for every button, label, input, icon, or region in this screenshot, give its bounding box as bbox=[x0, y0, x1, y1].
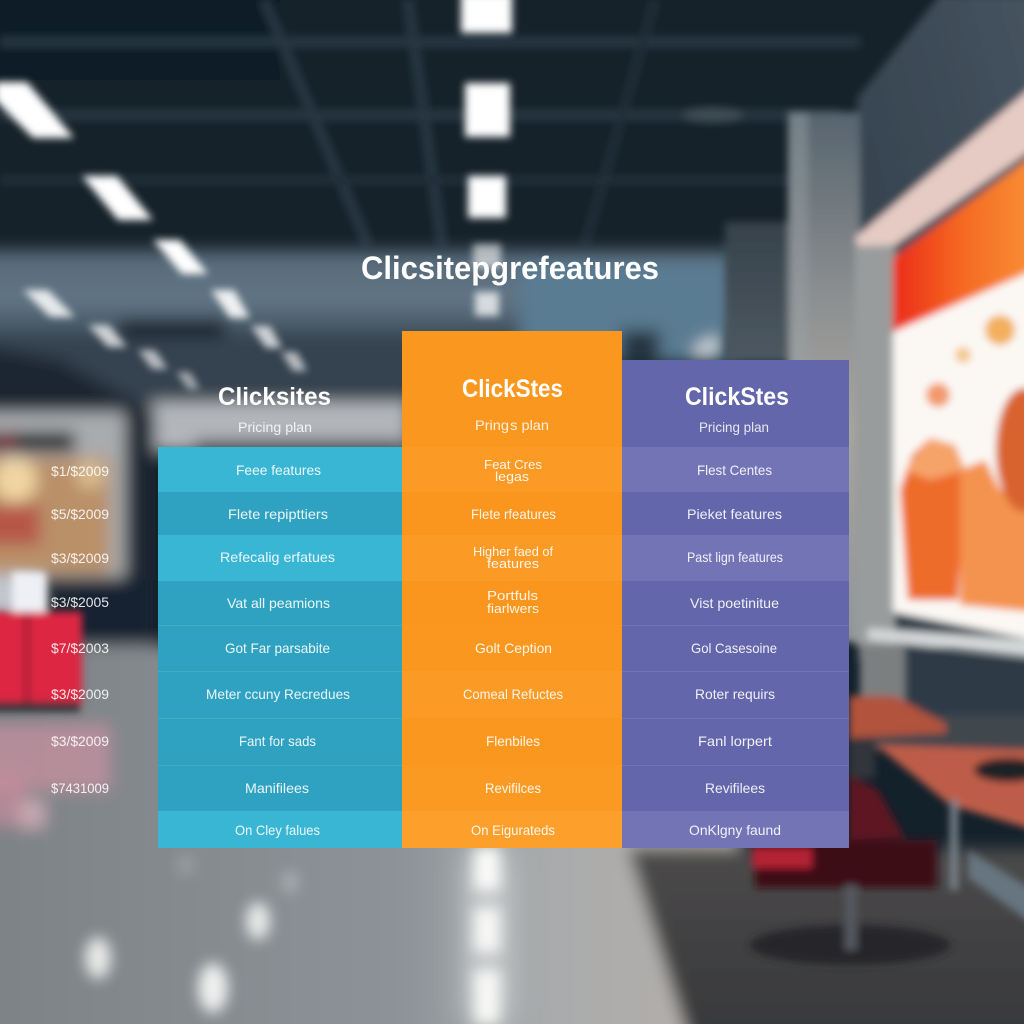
orange row labels: On Eigurateds bbox=[471, 822, 555, 838]
right side architecture bbox=[725, 0, 1024, 965]
teal row labels bbox=[206, 462, 350, 838]
back wall bbox=[150, 402, 410, 452]
purple row labels: Pieket features bbox=[687, 506, 782, 522]
price column: $7/$2003 bbox=[51, 641, 109, 656]
tables and chairs bbox=[849, 696, 946, 738]
teal row labels: Vat all peamions bbox=[227, 595, 330, 611]
title: Clicsitepgrefeatures bbox=[361, 250, 659, 286]
heading: teal plan: Clicksites bbox=[218, 383, 331, 411]
teal row labels: Feee features bbox=[236, 462, 321, 478]
orange row labels: Comeal Refuctes bbox=[463, 686, 563, 702]
teal row labels: Fant for sads bbox=[239, 733, 316, 749]
panel: teal plan column bbox=[158, 383, 402, 848]
dark floor right bbox=[628, 848, 1024, 1024]
orange row labels: Flete rfeatures bbox=[471, 506, 556, 522]
teal row labels: Meter ccuny Recredues bbox=[206, 686, 350, 702]
orange row labels: Feat Cres bbox=[484, 457, 543, 472]
price column: $3/$2009 bbox=[51, 734, 109, 749]
red counters bbox=[0, 612, 82, 704]
price column: $3/$2009 bbox=[51, 551, 109, 566]
floor reflections bbox=[85, 848, 509, 1024]
price column: $3/$2005 bbox=[51, 595, 109, 610]
purple row labels: Revifilees bbox=[705, 780, 765, 796]
orange row labels: Portfuls bbox=[487, 588, 539, 603]
teal rows bbox=[158, 447, 402, 848]
mural bbox=[893, 155, 1024, 640]
orange row labels: Revifilces bbox=[485, 780, 541, 796]
orange row labels: legas bbox=[495, 469, 530, 484]
subheading: teal plan: Pricing plan bbox=[238, 419, 312, 435]
price column: $7431009 bbox=[51, 781, 109, 796]
orange row labels: Higher faed of bbox=[473, 544, 553, 559]
teal row labels: Flete repipttiers bbox=[228, 506, 328, 522]
subheading: purple plan: Pricing plan bbox=[699, 419, 769, 435]
purple column rows bbox=[622, 360, 849, 848]
mid ceiling band bbox=[0, 250, 780, 335]
orange column rows bbox=[402, 331, 622, 848]
price column: $5/$2009 bbox=[51, 507, 109, 522]
ceiling lights bbox=[0, 0, 512, 389]
purple row labels bbox=[687, 462, 783, 838]
price column: $3/$2009 bbox=[51, 687, 109, 702]
panel: purple plan column bbox=[622, 360, 849, 848]
heading: purple plan: ClickStes bbox=[685, 383, 789, 411]
orange row labels bbox=[463, 457, 563, 838]
price column bbox=[51, 464, 109, 796]
teal row labels: Manifilees bbox=[245, 780, 309, 796]
left store bbox=[0, 345, 150, 660]
red reflection bbox=[0, 725, 110, 790]
teal row labels: Got Far parsabite bbox=[225, 640, 330, 656]
teal row labels: Refecalig erfatues bbox=[220, 549, 335, 565]
price column: $1/$2009 bbox=[51, 464, 109, 479]
heading: orange plan: ClickStes bbox=[462, 375, 563, 403]
teal row labels: On Cley falues bbox=[235, 822, 320, 838]
purple row labels: Past lign features bbox=[687, 549, 783, 565]
purple row labels: Vist poetinitue bbox=[690, 595, 779, 611]
ceiling bbox=[0, 0, 1024, 252]
purple row labels: Fanl lorpert bbox=[698, 733, 772, 749]
purple row labels: Roter requirs bbox=[695, 686, 775, 702]
orange row labels: Flenbiles bbox=[486, 733, 540, 749]
orange row labels: features bbox=[487, 556, 540, 571]
orange row labels: fiarlwers bbox=[487, 601, 540, 616]
orange row labels: Golt Ception bbox=[475, 640, 552, 656]
purple row labels: Gol Casesoine bbox=[691, 640, 777, 656]
panel: orange plan column bbox=[402, 331, 622, 848]
subheading: orange plan: Pring s plan bbox=[475, 417, 549, 433]
floor bbox=[0, 645, 740, 1024]
purple row labels: OnKlgny faund bbox=[689, 822, 781, 838]
purple row labels: Flest Centes bbox=[697, 462, 772, 478]
